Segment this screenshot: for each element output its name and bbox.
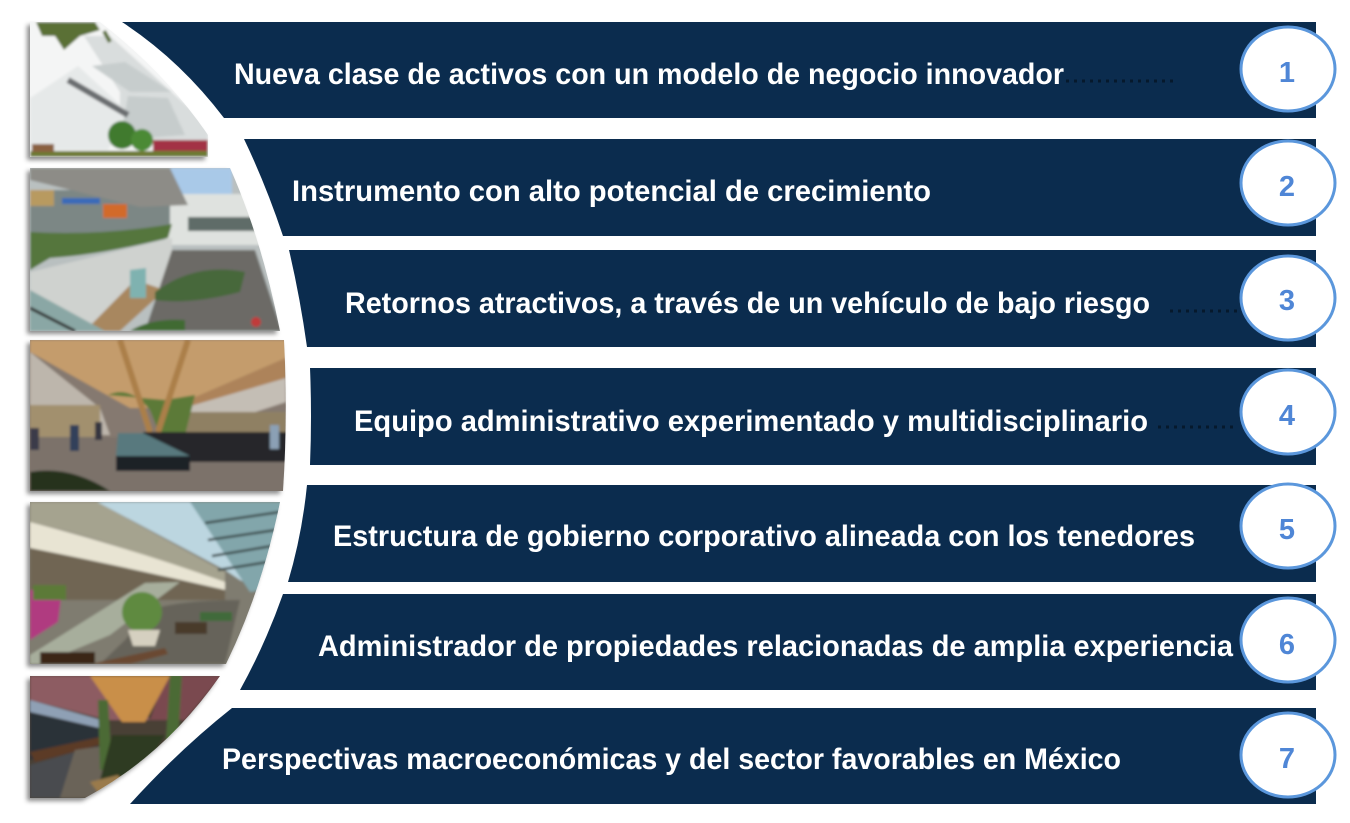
panel: photo 5, interior atrium with plants (28, 674, 223, 802)
number badge 4: 4 (1279, 400, 1295, 432)
text: statement 7: Perspectivas macroeconómicas y del sector favorables en México (222, 743, 1121, 776)
panel: strip 2 (244, 139, 1316, 236)
number badge 6 (1241, 598, 1335, 682)
number badge 5: 5 (1279, 514, 1295, 546)
panel: strip 1 (122, 22, 1316, 118)
number badge 2: 2 (1279, 171, 1295, 203)
number badge 6: 6 (1279, 629, 1295, 661)
text: statement 4: Equipo administrativo experimentado y multidisciplinario (354, 405, 1148, 438)
panel: photo 1, building exterior (28, 20, 213, 160)
text: statement 6: Administrador de propiedades relacionadas de amplia experiencia (318, 630, 1233, 663)
panel: strip 4 (310, 368, 1316, 465)
text: statement 2: Instrumento con alto potencial de crecimiento (292, 175, 931, 208)
text: statement 3: Retornos atractivos, a través de un vehículo de bajo riesgo (345, 287, 1150, 320)
panel: photo 4, mall walkway with glass roof (28, 500, 283, 666)
number badge 7: 7 (1279, 743, 1295, 775)
number badge 7 (1241, 713, 1335, 797)
number badge 3: 3 (1279, 285, 1295, 317)
number badge 5 (1241, 484, 1335, 568)
dotted leader 1 (1066, 80, 1178, 82)
number badge 1 (1241, 27, 1335, 111)
panel: strip 5 (288, 485, 1316, 582)
dotted leader 3 (1170, 310, 1238, 312)
number badge 2 (1241, 141, 1335, 225)
panel: strip 7 (130, 708, 1316, 804)
panel: strip 3 (289, 250, 1316, 347)
panel: photo 2, shopping terrace (28, 166, 283, 334)
text: statement 5: Estructura de gobierno corporativo alineada con los tenedores (333, 520, 1195, 553)
number badge 1: 1 (1279, 57, 1295, 89)
panel: strip 6 (240, 594, 1316, 690)
dotted leader 4 (1158, 426, 1238, 428)
text: statement 1: Nueva clase de activos con un modelo de negocio innovador (234, 58, 1064, 91)
number badge 4 (1241, 370, 1335, 454)
number badge 3 (1241, 256, 1335, 340)
panel: photo 3, atrium with wood ceiling (28, 338, 288, 494)
